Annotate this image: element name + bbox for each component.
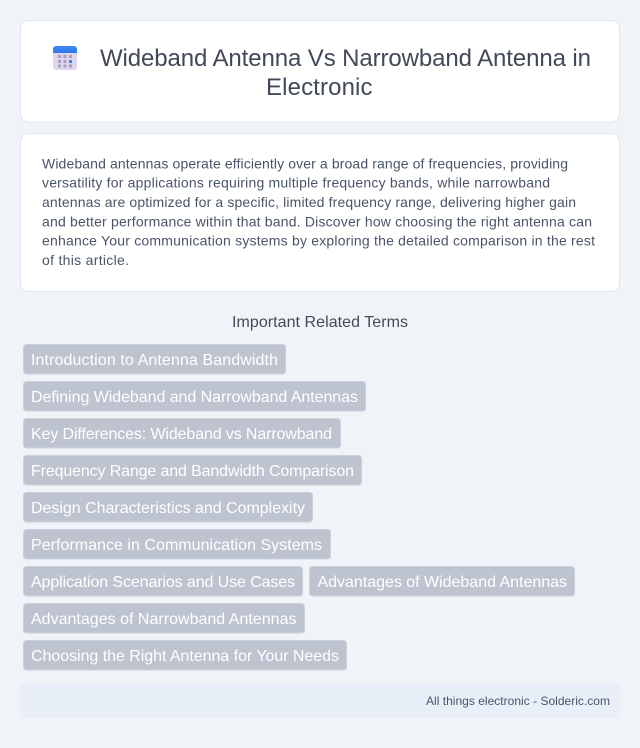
tag: defining: Defining Wideband and Narrowband Antennas (31, 389, 358, 406)
intro text: versatility for applications requiring multiple frequency bands, while narrowband (42, 175, 550, 191)
tag: narrowband advantages (24, 604, 304, 633)
intro text: Wideband antennas operate efficiently over a broad range of frequencies, providing (42, 155, 568, 171)
tag: application: Application Scenarios and Use Cases (31, 574, 295, 591)
tag: frequency range: Frequency Range and Bandwidth Comparison (31, 463, 354, 480)
intro text: and better performance within that band. Discover how choosing the right antenna can (42, 213, 592, 229)
tag: key differences: Key Differences: Wideband vs Narrowband (31, 426, 332, 443)
intro panel (20, 134, 620, 292)
tag: wideband advantages (310, 566, 574, 596)
tag: introduction: Introduction to Antenna Bandwidth (31, 352, 278, 369)
footer: All things electronic - Solderic.com (426, 694, 610, 708)
tag: performance: Performance in Communication Systems (31, 537, 322, 554)
title: Wideband Antenna Vs Narrowband Antenna in (100, 45, 591, 72)
tag: choosing: Choosing the Right Antenna for Your Needs (31, 648, 339, 665)
intro text (42, 155, 595, 268)
title: Electronic (266, 74, 372, 101)
tag: design (24, 492, 312, 522)
tag: performance (24, 530, 330, 559)
tag: application (24, 566, 302, 596)
icon: calendar (53, 46, 77, 70)
footer (20, 684, 620, 718)
heading: related terms: Important Related Terms (232, 314, 408, 331)
intro text: enhance Your communication systems by exploring the detailed comparison in the rest (42, 233, 595, 249)
tag: choosing (24, 640, 346, 670)
intro text: of this article. (42, 252, 129, 268)
tag: design: Design Characteristics and Complexity (31, 500, 305, 517)
tag: narrowband advantages: Advantages of Narrowband Antennas (31, 611, 296, 628)
tag: defining (24, 382, 366, 411)
intro text: antennas are optimized for a specific, limited frequency range, delivering higher gain (42, 194, 576, 210)
tag: frequency range (24, 456, 362, 485)
tag list (24, 344, 574, 670)
tag: key differences (24, 418, 340, 448)
tag: introduction (24, 344, 286, 374)
tag: wideband advantages: Advantages of Wideband Antennas (318, 574, 567, 591)
header panel (20, 20, 620, 122)
title (100, 45, 591, 101)
